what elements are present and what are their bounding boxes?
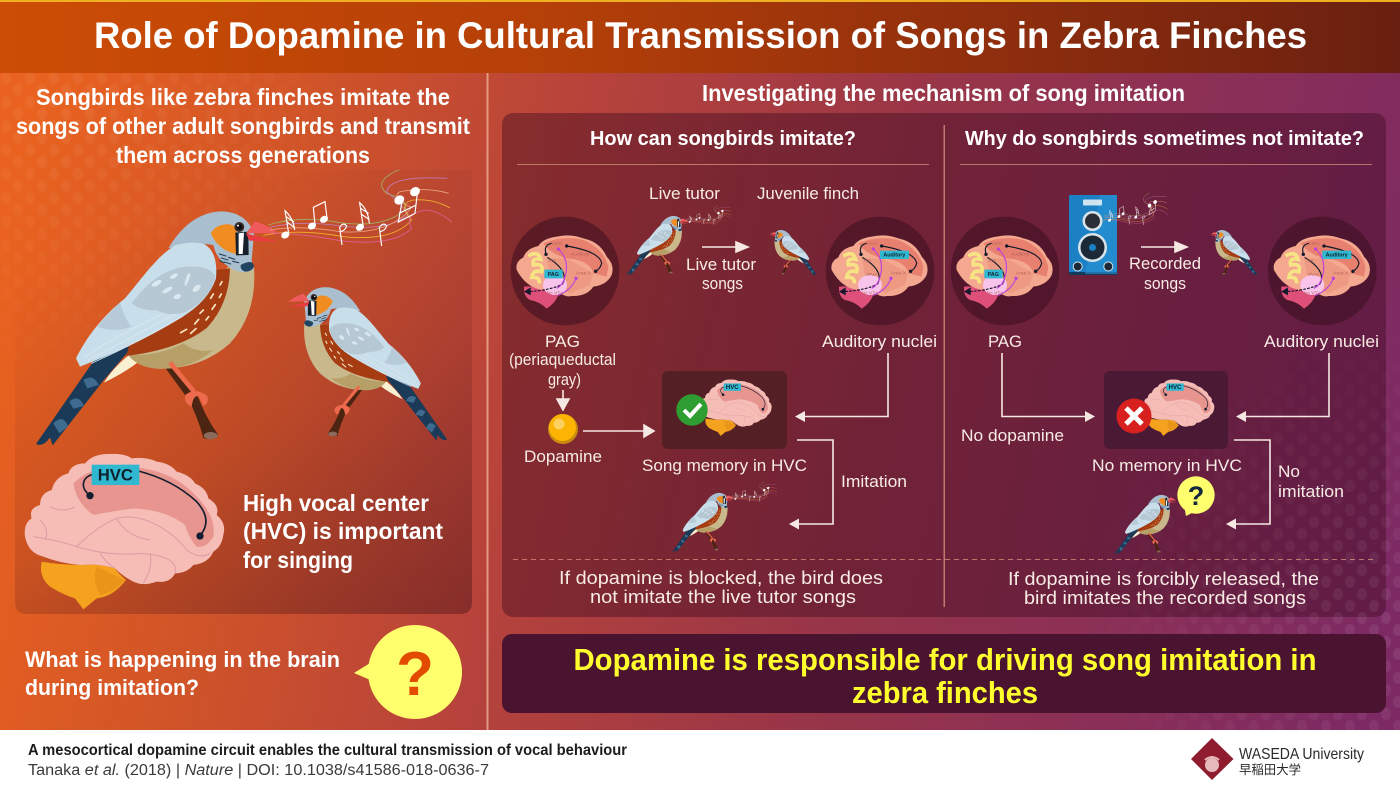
footer: [0, 730, 1400, 788]
brain: auditory: PAG: [867, 272, 877, 278]
arrow: [702, 242, 748, 252]
brain: PAG: [511, 217, 619, 325]
brain: PAG: Auditory: [1011, 251, 1030, 257]
icon: question bubble small: [1177, 476, 1215, 516]
brain: auditory: [826, 217, 934, 325]
text: dopamine blocked: not imitate the live tutor songs: [590, 587, 856, 607]
label: auditory nuclei: Auditory nuclei: [1264, 332, 1379, 351]
brain: auditory: HVC: [867, 241, 878, 247]
text: dopamine released: [1008, 569, 1319, 608]
panel: conclusion: [502, 634, 1386, 713]
arrow: dopamine to memory: [583, 425, 654, 437]
header bar: [0, 0, 1400, 73]
question text: [25, 647, 340, 700]
intro text: songs of other adult songbirds and transmit: [16, 113, 470, 139]
icon: notes from speaker: [1102, 193, 1168, 225]
brain: PAG: HVC: [992, 241, 1003, 247]
icon: brain: HVC: [1169, 385, 1182, 391]
icon: juvenile zebra finch: [288, 287, 447, 440]
arrow: [1141, 242, 1187, 252]
label: dopamine: Dopamine: [524, 447, 602, 466]
intro text: them across generations: [116, 142, 370, 168]
brain: auditory: Nc VTA: [1304, 291, 1321, 297]
brain: auditory: Nc VTA: [862, 291, 879, 297]
icon: imitating bird: [673, 482, 777, 552]
label: no imitation: imitation: [1278, 482, 1344, 501]
label: no imitation: [1278, 462, 1344, 501]
brain: auditory: Auditory: [883, 253, 905, 259]
icon: dopamine: [548, 414, 578, 444]
logo: Waseda University: [1191, 738, 1364, 780]
logo: Waseda University: WASEDA University: [1239, 746, 1364, 763]
icon: speaker: [1069, 195, 1117, 275]
icon: live tutor bird: [627, 206, 732, 275]
brain: auditory: RA: [864, 258, 872, 264]
intro text: Songbirds like zebra finches imitate the: [36, 84, 450, 110]
label: live tutor songs: Live tutor: [686, 255, 756, 274]
text: dopamine released: bird imitates the recorded songs: [1024, 588, 1306, 608]
icon: brain: HVC: [726, 385, 739, 391]
citation: Tanaka et al. (2018) | Nature | DOI: 10.1038/s41586-018-0636-7: [28, 762, 489, 779]
label: live tutor: Live tutor: [649, 184, 720, 203]
label: recorded songs: Recorded: [1129, 254, 1201, 273]
icon: question bubble: ?: [396, 640, 434, 709]
text: dopamine blocked: If dopamine is blocked, the bird does: [559, 568, 883, 588]
text: HVC description: for singing: [243, 547, 353, 573]
label: PAG: (periaqueductal: [509, 350, 616, 369]
panel: conclusion: Dopamine is responsible for driving song imitation in: [574, 642, 1316, 677]
text: HVC description: (HVC) is important: [243, 518, 443, 544]
text: HVC description: [243, 490, 443, 573]
arrow: imitation: [789, 440, 833, 530]
column: how can songbirds imitate: [509, 128, 937, 607]
question text: during imitation?: [25, 675, 199, 700]
panel: song memory: [662, 371, 787, 449]
arrow: no imitation: [1226, 440, 1270, 530]
heading: How can songbirds imitate?: [590, 128, 856, 150]
panel: no memory: [1104, 371, 1228, 449]
brain: auditory: RA: [1306, 258, 1314, 264]
divider: [486, 73, 488, 730]
brain: auditory: [1268, 217, 1377, 325]
citation: A mesocortical dopamine circuit enables the cultural transmission of vocal behaviour: [28, 742, 627, 759]
brain: auditory: Auditory: [1326, 253, 1348, 259]
brain: PAG: RA: [549, 258, 557, 264]
arrow: auditory to memory: [1236, 353, 1329, 422]
logo: Waseda University: 早稲田大学: [1239, 762, 1301, 777]
brain: PAG: Auditory: [571, 251, 590, 257]
label: PAG: PAG: [988, 332, 1022, 351]
brain: PAG: Area X: [576, 271, 592, 277]
arrow: PAG to dopamine: [557, 390, 569, 410]
label: PAG: gray): [548, 370, 581, 389]
label: recorded songs: songs: [1144, 274, 1186, 293]
icon: juvenile bird: [770, 230, 817, 276]
icon: check: [676, 394, 708, 426]
icon: cross: [1116, 398, 1152, 434]
label: no memory: No memory in HVC: [1092, 456, 1242, 475]
text: HVC description: High vocal center: [243, 490, 429, 516]
brain: PAG: HVC: [552, 241, 563, 247]
label: no dopamine: No dopamine: [961, 426, 1064, 445]
label: imitation: Imitation: [841, 472, 907, 491]
brain: auditory: HVC: [1309, 241, 1320, 247]
label: PAG: [509, 332, 616, 389]
intro text: [16, 84, 470, 168]
brain: PAG: Area X: [1016, 271, 1032, 277]
label: song memory: Song memory in HVC: [642, 456, 807, 475]
heading: investigating: Investigating the mechanism of song imitation: [702, 80, 1185, 106]
arrow: auditory to memory: [795, 353, 888, 422]
halftone dots: [1232, 470, 1400, 730]
panel: conclusion: zebra finches: [852, 675, 1038, 710]
panel: mechanism of song imitation: [502, 113, 1386, 617]
icon: adult zebra finch singing: [36, 170, 452, 445]
panel: high vocal center: [15, 170, 472, 614]
brain: PAG: Nc VTA: [987, 291, 1004, 297]
icon: non-imitating bird: [1115, 495, 1176, 554]
text: dopamine released: If dopamine is forcibly released, the: [1008, 569, 1319, 589]
text: dopamine blocked: [559, 568, 883, 607]
brain: auditory: Area X: [891, 271, 907, 277]
brain: PAG: PAG: [548, 272, 559, 278]
brain: PAG: Nc VTA: [547, 291, 564, 297]
citation: [28, 742, 627, 779]
label: live tutor songs: [686, 255, 756, 293]
label: recorded songs: [1129, 254, 1201, 293]
title: Role of Dopamine in Cultural Transmission of Songs in Zebra Finches: [94, 15, 1307, 56]
question text: What is happening in the brain: [25, 647, 340, 672]
brain: PAG: [951, 217, 1059, 325]
brain: auditory: PAG: [1309, 272, 1319, 278]
label: live tutor songs: songs: [702, 274, 743, 293]
column: why do songbirds sometimes not imitate: [951, 128, 1379, 608]
icon: juvenile bird: [1211, 230, 1258, 276]
brain: PAG: RA: [989, 258, 997, 264]
icon: HVC brain: [25, 454, 224, 609]
label: PAG: PAG: [545, 332, 580, 351]
icon: question bubble small: ?: [1188, 481, 1204, 511]
label: no imitation: No: [1278, 462, 1300, 481]
label: auditory nuclei: Auditory nuclei: [822, 332, 937, 351]
brain: PAG: PAG: [988, 272, 999, 278]
brain: auditory: Area X: [1333, 271, 1349, 277]
arrow: PAG to memory: [1002, 353, 1095, 422]
icon: question bubble: [354, 625, 462, 719]
heading: Why do songbirds sometimes not imitate?: [965, 128, 1364, 150]
label: juvenile finch: Juvenile finch: [757, 184, 859, 203]
icon: HVC brain: HVC: [98, 465, 133, 484]
